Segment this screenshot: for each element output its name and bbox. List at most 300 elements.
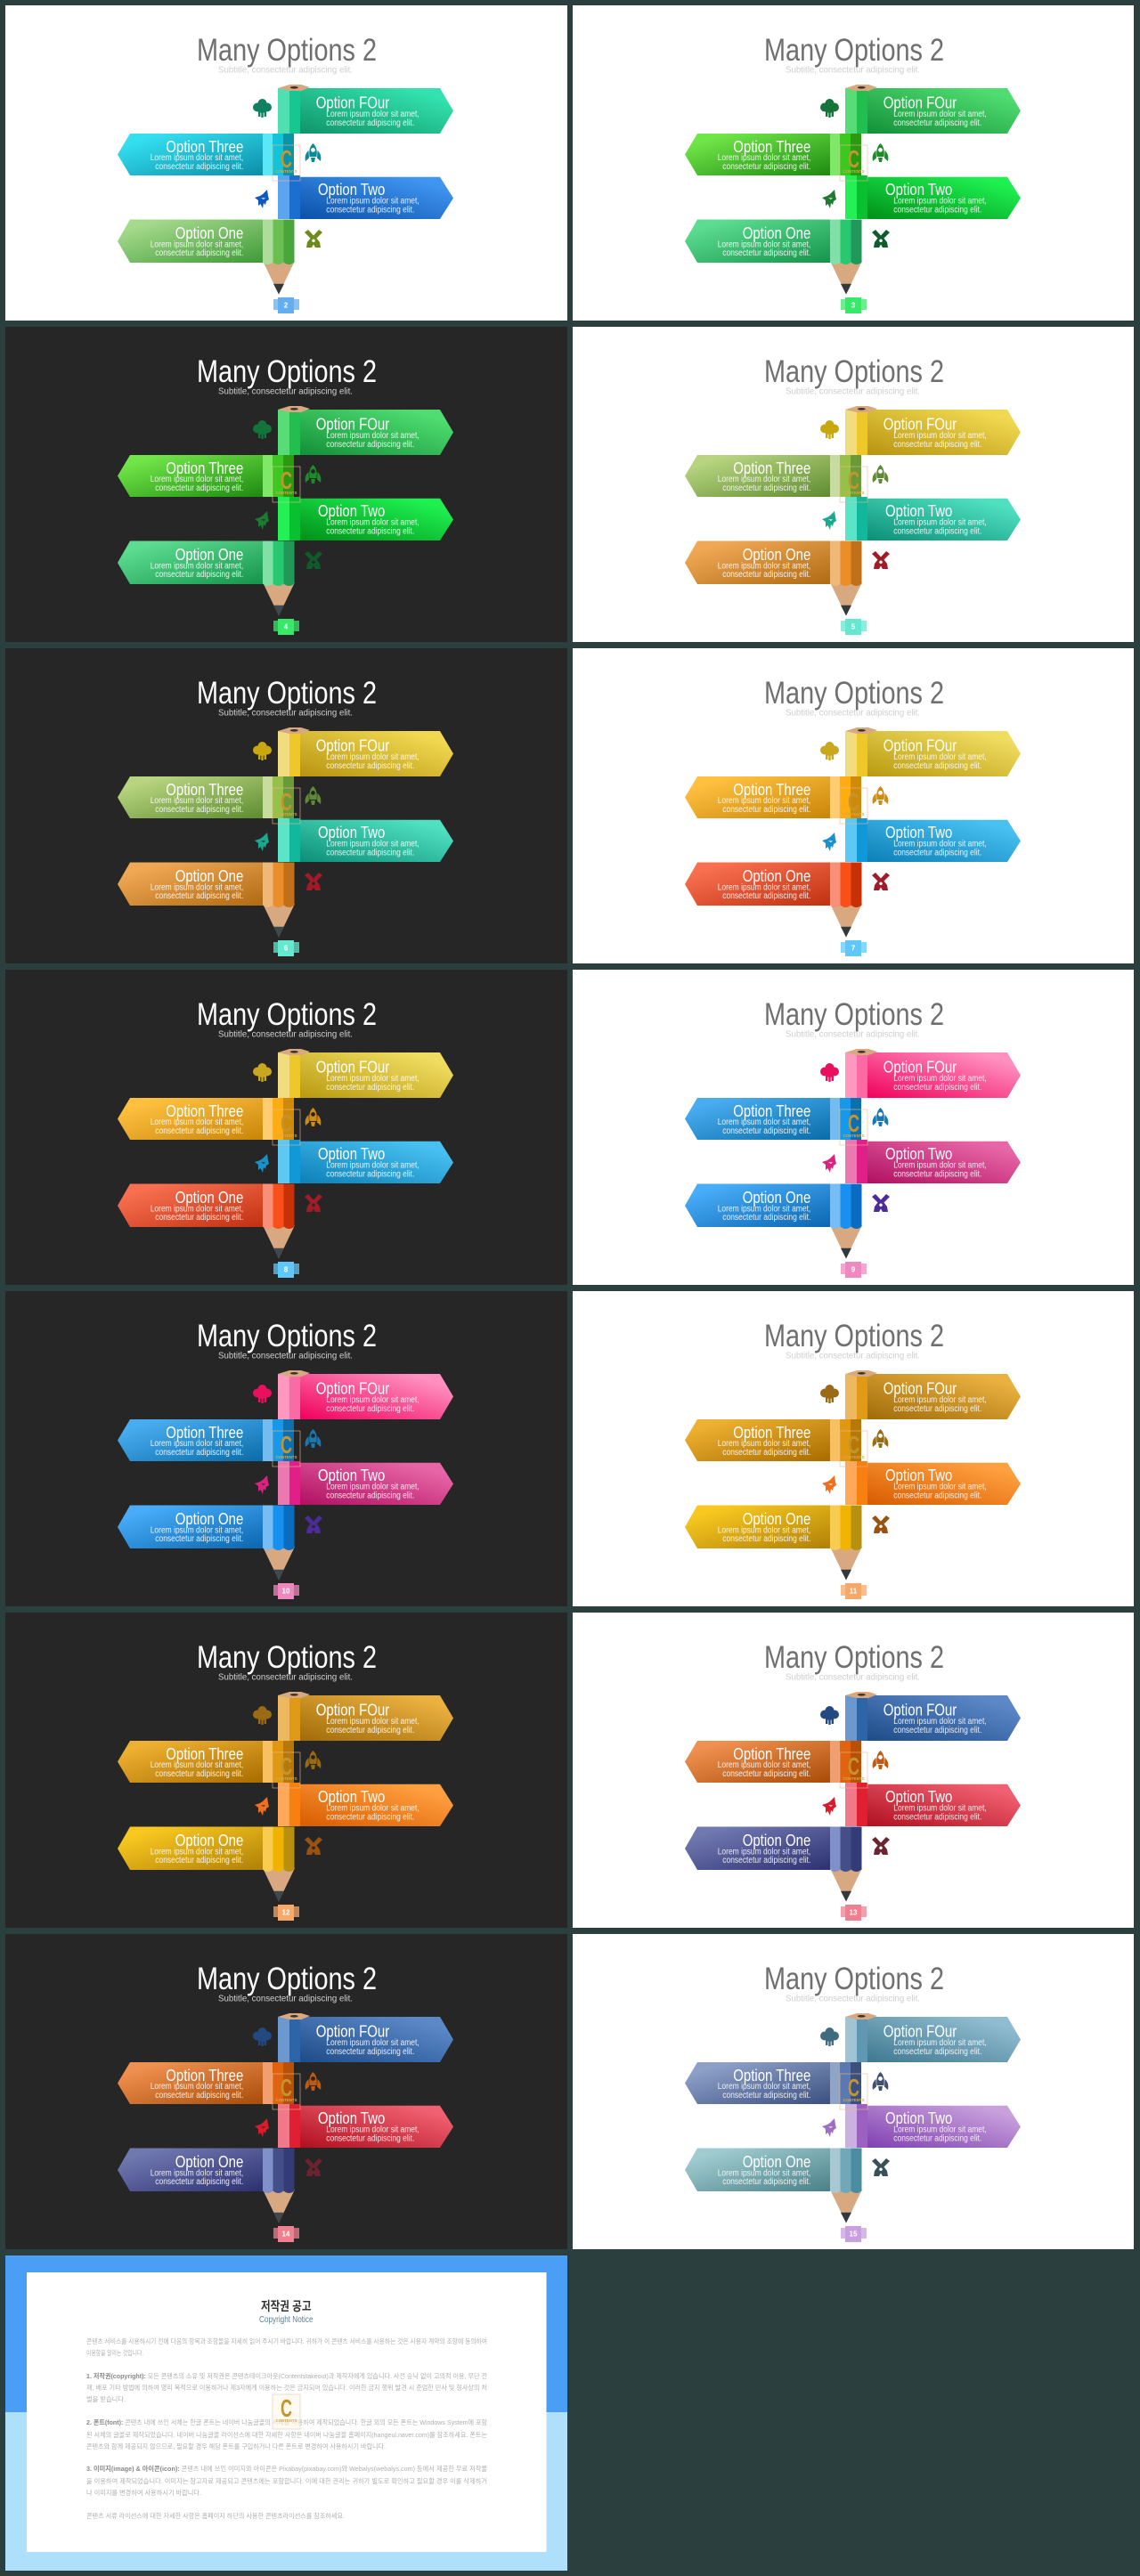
pencil: [263, 1049, 310, 1259]
watermark: [273, 145, 300, 181]
option two arrow: consectetur adipiscing elit.: [326, 848, 414, 858]
watermark: [273, 1752, 300, 1788]
option four arrow: Option FOur: [316, 94, 389, 112]
option one arrow: consectetur adipiscing elit.: [155, 570, 243, 580]
icon: spaceship: [255, 833, 269, 851]
option two arrow: Option Two: [885, 1788, 952, 1806]
option three arrow: Option Three: [733, 1745, 810, 1763]
option two arrow: Option Two: [318, 1788, 385, 1806]
icon: spaceship: [255, 511, 269, 530]
option four arrow: Lorem ipsum dolor sit amet,: [326, 110, 419, 119]
option four arrow: [867, 1374, 1021, 1419]
option two arrow: Lorem ipsum dolor sit amet,: [893, 1482, 987, 1492]
option three arrow: consectetur adipiscing elit.: [722, 2091, 810, 2101]
option two arrow: [867, 1463, 1021, 1505]
page number: [273, 297, 299, 313]
icon: spaceship: [255, 1797, 269, 1816]
option two arrow: Option Two: [318, 1467, 385, 1484]
option three arrow: Option Three: [166, 781, 243, 799]
option two arrow: Lorem ipsum dolor sit amet,: [893, 839, 987, 849]
watermark: [273, 788, 300, 824]
option two arrow: Option Two: [318, 2109, 385, 2127]
slide 11: white, ambers: [573, 1291, 1134, 1606]
page number: 10: [282, 1587, 290, 1596]
option one arrow: Lorem ipsum dolor sit amet,: [151, 240, 243, 249]
pencil: [830, 2013, 877, 2223]
icon: spaceship: [255, 1475, 269, 1494]
option four arrow: Lorem ipsum dolor sit amet,: [326, 1717, 419, 1727]
option three arrow: Lorem ipsum dolor sit amet,: [718, 153, 810, 163]
option one arrow: consectetur adipiscing elit.: [155, 1213, 243, 1223]
icon: spaceship: [822, 1154, 836, 1173]
page number: 3: [851, 301, 856, 310]
option three arrow: Option Three: [733, 1424, 810, 1442]
option two arrow: Lorem ipsum dolor sit amet,: [893, 196, 987, 207]
title: Many Options 2: [764, 1962, 944, 1996]
icon: windmill: [872, 230, 890, 248]
slide 13: white, navy orange red indigo: [573, 1613, 1134, 1928]
page number: 7: [851, 944, 856, 953]
subtitle: Subtitle, consectetur adipiscing elit.: [218, 707, 353, 718]
option four arrow: consectetur adipiscing elit.: [893, 1404, 981, 1414]
option one arrow: Option One: [175, 1510, 243, 1528]
icon: spaceship: [255, 190, 269, 208]
pencil: [263, 85, 310, 294]
option four arrow: [867, 1052, 1021, 1098]
page number: 2: [284, 301, 289, 310]
page number: 11: [850, 1587, 858, 1596]
icon: rocket: [873, 1108, 888, 1126]
option four arrow: Lorem ipsum dolor sit amet,: [893, 110, 987, 119]
option one arrow: [118, 2148, 263, 2191]
page number: [273, 2226, 299, 2242]
option three arrow: consectetur adipiscing elit.: [155, 1126, 243, 1136]
page number: 4: [284, 623, 289, 630]
option four arrow: Option FOur: [884, 415, 957, 433]
option four arrow: Option FOur: [316, 2023, 389, 2041]
option three arrow: [685, 1098, 830, 1140]
page number: [841, 1905, 867, 1921]
watermark: C: [848, 788, 859, 816]
page number: [273, 1905, 299, 1921]
option four arrow: consectetur adipiscing elit.: [326, 440, 414, 450]
icon: tree: [253, 742, 272, 760]
option three arrow: Option Three: [733, 459, 810, 477]
subtitle: Subtitle, consectetur adipiscing elit.: [786, 1029, 920, 1040]
option two arrow: [300, 1784, 453, 1826]
copyright body text: 3. 이미지(image) & 아이콘(icon): 콘텐츠 내에 쓰인 이미지와 아이콘은 Pixabay(pixabay.com)와 Webalys(webalys.com) 등에서 제공한 무료 저작물: [86, 2464, 487, 2473]
option three arrow: Lorem ipsum dolor sit amet,: [718, 796, 810, 806]
icon: tree: [820, 1706, 839, 1725]
pencil: [830, 727, 877, 937]
option two arrow: [300, 820, 453, 862]
option one arrow: Option One: [743, 546, 810, 564]
copyright body text: 나 이미지를 변경하여 사용하시기 바랍니다.: [86, 2488, 201, 2497]
option three arrow: [118, 455, 263, 497]
option one arrow: Option One: [743, 1510, 810, 1528]
option one arrow: consectetur adipiscing elit.: [722, 2177, 810, 2187]
icon: spaceship: [822, 1797, 836, 1816]
watermark: [273, 467, 300, 502]
option three arrow: Lorem ipsum dolor sit amet,: [151, 2082, 243, 2092]
option three arrow: Lorem ipsum dolor sit amet,: [151, 796, 243, 806]
page number: [273, 940, 299, 956]
watermark: CONTENTS: [276, 812, 297, 817]
page number: 9: [851, 1266, 856, 1273]
watermark: CONTENTS: [843, 169, 864, 174]
icon: windmill: [872, 873, 890, 890]
page number: [841, 297, 867, 313]
watermark: [273, 2074, 300, 2109]
watermark: [840, 1431, 867, 1467]
subtitle: Subtitle, consectetur adipiscing elit.: [786, 1993, 920, 2003]
icon: windmill: [305, 551, 322, 569]
slide 10: dark, pink blue magenta blue: [5, 1291, 567, 1606]
option four arrow: Option FOur: [316, 1701, 389, 1719]
option two arrow: Option Two: [885, 502, 952, 520]
option one arrow: Lorem ipsum dolor sit amet,: [151, 1847, 243, 1857]
subtitle: Subtitle, consectetur adipiscing elit.: [786, 386, 920, 397]
option four arrow: consectetur adipiscing elit.: [893, 761, 981, 771]
option one arrow: Lorem ipsum dolor sit amet,: [151, 883, 243, 892]
icon: tree: [820, 420, 839, 439]
option four arrow: Lorem ipsum dolor sit amet,: [326, 431, 419, 441]
icon: tree: [820, 742, 839, 760]
copyright body text: 재, 배포 기타 방법에 의하여 영리 목적으로 이용하거나 제3자에게 이용하는 것은 금지되어 있습니다. 이러한 금지 행위 발견 시 준엄한 민사 및 형사상의 처: [86, 2383, 487, 2392]
option four arrow: Option FOur: [884, 1058, 957, 1076]
slide 6: dark, yellow olive teal orange: [5, 648, 567, 963]
option two arrow: consectetur adipiscing elit.: [326, 1491, 414, 1501]
pencil: [830, 1049, 877, 1259]
option four arrow: Option FOur: [884, 94, 957, 112]
option three arrow: Option Three: [733, 2067, 810, 2084]
option three arrow: [685, 1419, 830, 1461]
option one arrow: consectetur adipiscing elit.: [722, 891, 810, 901]
watermark: C: [281, 2394, 292, 2422]
pencil: [830, 1692, 877, 1902]
option three arrow: consectetur adipiscing elit.: [722, 805, 810, 815]
option three arrow: consectetur adipiscing elit.: [155, 1769, 243, 1779]
icon: windmill: [305, 230, 322, 248]
option three arrow: Lorem ipsum dolor sit amet,: [151, 475, 243, 484]
watermark: C: [281, 2074, 292, 2101]
page number: 15: [850, 2230, 858, 2239]
option two arrow: Option Two: [318, 1145, 385, 1163]
option four arrow: Option FOur: [884, 1701, 957, 1719]
option four arrow: Lorem ipsum dolor sit amet,: [893, 752, 987, 762]
icon: spaceship: [822, 1475, 836, 1494]
watermark: CONTENTS: [276, 491, 297, 495]
option three arrow: [118, 1741, 263, 1783]
icon: tree: [820, 2027, 839, 2046]
subtitle: Subtitle, consectetur adipiscing elit.: [218, 64, 353, 75]
option three arrow: [685, 134, 830, 175]
icon: tree: [253, 420, 272, 439]
option three arrow: Option Three: [166, 2067, 243, 2084]
option three arrow: [118, 1098, 263, 1140]
pencil: [263, 1370, 310, 1580]
option four arrow: consectetur adipiscing elit.: [326, 1083, 414, 1093]
pencil: [263, 727, 310, 937]
watermark: [273, 2394, 300, 2429]
page number: 12: [282, 1909, 290, 1916]
page number: [841, 940, 867, 956]
subtitle: Subtitle, consectetur adipiscing elit.: [218, 386, 353, 397]
title: Many Options 2: [197, 676, 377, 711]
option one arrow: Option One: [743, 1189, 810, 1207]
option three arrow: Option Three: [733, 138, 810, 156]
option four arrow: [300, 410, 453, 455]
option four arrow: Option FOur: [316, 1058, 389, 1076]
icon: rocket: [305, 786, 321, 805]
option three arrow: consectetur adipiscing elit.: [155, 805, 243, 815]
watermark: CONTENTS: [276, 2098, 297, 2102]
option three arrow: Lorem ipsum dolor sit amet,: [718, 1117, 810, 1127]
option four arrow: consectetur adipiscing elit.: [893, 2047, 981, 2057]
title: Many Options 2: [197, 1962, 377, 1996]
option two arrow: [867, 1142, 1021, 1183]
option three arrow: [685, 455, 830, 497]
copyright body text: 콘텐츠와 함께 제공되지 않으므로, 필요할 경우 해당 폰트를 구입하거나 다른 폰트로 변경하여 사용하시기 바랍니다.: [86, 2442, 386, 2450]
option four arrow: consectetur adipiscing elit.: [326, 1404, 414, 1414]
option four arrow: Lorem ipsum dolor sit amet,: [893, 1074, 987, 1084]
subtitle: Subtitle, consectetur adipiscing elit.: [218, 1029, 353, 1040]
icon: windmill: [305, 873, 322, 890]
copyright body text: 콘텐츠 서류 라이선스에 대한 자세한 사항은 홈페이지 하단의 사용한 콘텐츠라이선스를 참조하세요.: [86, 2511, 345, 2520]
option two arrow: [300, 177, 453, 219]
page number: [841, 619, 867, 635]
page number: 13: [850, 1909, 858, 1916]
option two arrow: Option Two: [318, 824, 385, 841]
watermark: CONTENTS: [276, 169, 297, 174]
option four arrow: consectetur adipiscing elit.: [893, 118, 981, 128]
pencil: [830, 1370, 877, 1580]
option three arrow: Lorem ipsum dolor sit amet,: [151, 1117, 243, 1127]
option two arrow: Lorem ipsum dolor sit amet,: [893, 518, 987, 527]
option two arrow: Lorem ipsum dolor sit amet,: [326, 2125, 419, 2135]
option four arrow: [300, 2017, 453, 2062]
page number: [841, 1262, 867, 1278]
option one arrow: [685, 1184, 830, 1227]
option one arrow: Option One: [175, 1189, 243, 1207]
option four arrow: [300, 731, 453, 776]
option one arrow: Lorem ipsum dolor sit amet,: [718, 561, 810, 572]
icon: tree: [820, 1385, 839, 1403]
icon: rocket: [873, 1429, 888, 1448]
copyright subheading: Copyright Notice: [259, 2315, 314, 2325]
option one arrow: consectetur adipiscing elit.: [722, 1856, 810, 1865]
option one arrow: [685, 219, 830, 263]
option three arrow: Option Three: [166, 459, 243, 477]
title: Many Options 2: [764, 33, 944, 68]
option one arrow: Lorem ipsum dolor sit amet,: [151, 1526, 243, 1535]
icon: rocket: [873, 143, 888, 162]
option four arrow: consectetur adipiscing elit.: [893, 1083, 981, 1093]
option four arrow: Lorem ipsum dolor sit amet,: [326, 1395, 419, 1405]
option two arrow: consectetur adipiscing elit.: [893, 2133, 981, 2144]
option one arrow: consectetur adipiscing elit.: [722, 1534, 810, 1544]
title: Many Options 2: [764, 1319, 944, 1353]
option two arrow: consectetur adipiscing elit.: [326, 205, 414, 215]
option two arrow: Lorem ipsum dolor sit amet,: [326, 1161, 419, 1170]
option three arrow: [118, 1419, 263, 1461]
page number: [273, 1262, 299, 1278]
option one arrow: Option One: [743, 867, 810, 885]
page number: [273, 1583, 299, 1599]
title: Many Options 2: [197, 1319, 377, 1353]
title: Many Options 2: [764, 997, 944, 1032]
option two arrow: consectetur adipiscing elit.: [893, 1813, 981, 1822]
option one arrow: Option One: [175, 2153, 243, 2171]
option one arrow: Lorem ipsum dolor sit amet,: [718, 240, 810, 249]
option two arrow: Lorem ipsum dolor sit amet,: [326, 839, 419, 849]
panel: copyright notice: [5, 2255, 567, 2571]
option one arrow: Option One: [175, 224, 243, 242]
icon: spaceship: [822, 190, 836, 208]
option one arrow: [118, 1184, 263, 1227]
option three arrow: Lorem ipsum dolor sit amet,: [718, 2082, 810, 2092]
option three arrow: Lorem ipsum dolor sit amet,: [151, 153, 243, 163]
subtitle: Subtitle, consectetur adipiscing elit.: [786, 1672, 920, 1683]
watermark: C: [848, 2074, 859, 2101]
icon: rocket: [305, 2072, 321, 2091]
watermark: [840, 1109, 867, 1145]
option one arrow: [685, 2148, 830, 2191]
icon: windmill: [305, 1194, 322, 1212]
option one arrow: [685, 541, 830, 584]
pencil: [263, 406, 310, 616]
option one arrow: Lorem ipsum dolor sit amet,: [151, 561, 243, 572]
icon: windmill: [305, 1516, 322, 1533]
option three arrow: consectetur adipiscing elit.: [722, 162, 810, 172]
title: Many Options 2: [764, 1640, 944, 1675]
option three arrow: Option Three: [166, 1745, 243, 1763]
option three arrow: Option Three: [733, 781, 810, 799]
option one arrow: [118, 862, 263, 906]
icon: tree: [253, 1063, 272, 1082]
slide 2: white, teal cyan blue green: [5, 5, 567, 321]
option four arrow: Lorem ipsum dolor sit amet,: [326, 2038, 419, 2048]
icon: rocket: [873, 2072, 888, 2091]
copyright body text: [86, 2336, 487, 2520]
page number: 14: [282, 2230, 290, 2239]
option three arrow: Lorem ipsum dolor sit amet,: [718, 1760, 810, 1770]
page number: 8: [284, 1266, 289, 1273]
option four arrow: Lorem ipsum dolor sit amet,: [326, 752, 419, 762]
icon: windmill: [872, 1194, 890, 1212]
option two arrow: consectetur adipiscing elit.: [893, 1491, 981, 1501]
option two arrow: Option Two: [885, 181, 952, 199]
slide 15: white, muted slate purple teal: [573, 1934, 1134, 2249]
watermark: C: [848, 145, 859, 173]
icon: spaceship: [822, 2118, 836, 2137]
watermark: CONTENTS: [843, 1776, 864, 1781]
slide 4: dark, greens: [5, 327, 567, 642]
option two arrow: [300, 1463, 453, 1505]
watermark: CONTENTS: [843, 812, 864, 817]
option one arrow: [118, 541, 263, 584]
option one arrow: consectetur adipiscing elit.: [155, 2177, 243, 2187]
subtitle: Subtitle, consectetur adipiscing elit.: [786, 64, 920, 75]
option four arrow: [867, 2017, 1021, 2062]
option four arrow: Option FOur: [884, 1380, 957, 1398]
title: Many Options 2: [197, 997, 377, 1032]
page number: [273, 619, 299, 635]
watermark: C: [281, 1431, 292, 1459]
subtitle: Subtitle, consectetur adipiscing elit.: [218, 1672, 353, 1683]
option four arrow: Lorem ipsum dolor sit amet,: [893, 1717, 987, 1727]
pencil: [830, 85, 877, 294]
option three arrow: Option Three: [733, 1102, 810, 1120]
watermark: C: [848, 467, 859, 494]
icon: windmill: [872, 1837, 890, 1855]
subtitle: Subtitle, consectetur adipiscing elit.: [786, 1350, 920, 1361]
watermark: C: [281, 788, 292, 816]
option one arrow: [685, 1827, 830, 1870]
icon: rocket: [873, 465, 888, 484]
option four arrow: [300, 1374, 453, 1419]
copyright heading: 저작권 공고: [261, 2299, 312, 2313]
option four arrow: consectetur adipiscing elit.: [326, 2047, 414, 2057]
watermark: [840, 145, 867, 181]
title: Many Options 2: [197, 354, 377, 389]
icon: windmill: [305, 2158, 322, 2176]
watermark: [840, 788, 867, 824]
option two arrow: Lorem ipsum dolor sit amet,: [893, 1804, 987, 1813]
option three arrow: Lorem ipsum dolor sit amet,: [718, 1439, 810, 1449]
watermark: [273, 1431, 300, 1467]
watermark: C: [281, 1109, 292, 1137]
option one arrow: [685, 862, 830, 906]
copyright body text: 벌을 받습니다.: [86, 2394, 126, 2403]
option three arrow: consectetur adipiscing elit.: [155, 2091, 243, 2101]
watermark: C: [281, 467, 292, 494]
copyright body text: 2. 폰트(font): 콘텐츠 내에 쓰인 서체는 한글 폰트는 네이버 나눔글꼴의 서체를 사용하여 제작되었습니다. 한글 외의 모든 폰트는 Windows System에 포함: [86, 2418, 487, 2426]
icon: spaceship: [255, 2118, 269, 2137]
watermark: CONTENTS: [276, 1134, 297, 1138]
title: Many Options 2: [197, 1640, 377, 1675]
option two arrow: Lorem ipsum dolor sit amet,: [326, 196, 419, 207]
copyright body text: 콘텐츠 서비스를 사용하시기 전에 다음의 항목과 조항들을 자세히 읽어 주시기 바랍니다. 귀하가 이 콘텐츠 서비스를 사용하는 것은 사용자 계약의 조항에 동의하여: [86, 2336, 487, 2345]
page number: [841, 2226, 867, 2242]
subtitle: Subtitle, consectetur adipiscing elit.: [218, 1993, 353, 2003]
option three arrow: consectetur adipiscing elit.: [722, 1769, 810, 1779]
option one arrow: [118, 1505, 263, 1548]
option four arrow: consectetur adipiscing elit.: [893, 440, 981, 450]
option two arrow: Lorem ipsum dolor sit amet,: [893, 2125, 987, 2135]
option one arrow: consectetur adipiscing elit.: [155, 1534, 243, 1544]
option one arrow: consectetur adipiscing elit.: [722, 1213, 810, 1223]
option two arrow: [867, 2106, 1021, 2148]
icon: spaceship: [822, 833, 836, 851]
option one arrow: Option One: [743, 1832, 810, 1849]
watermark: C: [281, 1752, 292, 1780]
option one arrow: [118, 1827, 263, 1870]
option three arrow: [685, 2062, 830, 2104]
slide 3: white, greens: [573, 5, 1134, 321]
watermark: CONTENTS: [843, 1455, 864, 1459]
icon: rocket: [305, 1429, 321, 1448]
title: Many Options 2: [197, 33, 377, 68]
option four arrow: consectetur adipiscing elit.: [893, 1726, 981, 1735]
option three arrow: [118, 134, 263, 175]
option three arrow: Lorem ipsum dolor sit amet,: [718, 475, 810, 484]
slide 8: dark, yellow amber blue red: [5, 970, 567, 1285]
watermark: C: [848, 1109, 859, 1137]
option two arrow: Option Two: [885, 824, 952, 841]
option three arrow: consectetur adipiscing elit.: [722, 1448, 810, 1458]
option three arrow: Lorem ipsum dolor sit amet,: [151, 1760, 243, 1770]
